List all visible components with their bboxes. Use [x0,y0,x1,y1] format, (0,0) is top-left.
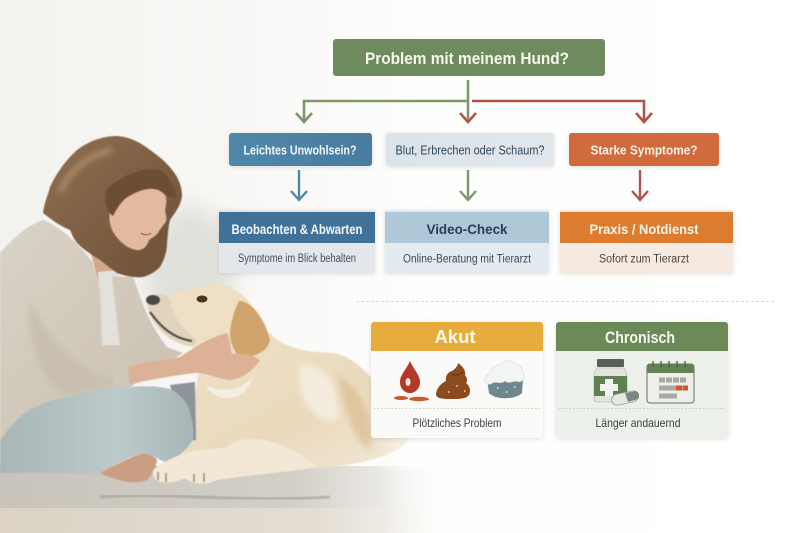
inner shirt [98,270,124,345]
panel: Chronisch [556,322,728,438]
question: Leichtes Unwohlsein: Leichtes Unwohlsein? [244,142,357,158]
arrow: green down [460,170,476,200]
dog muzzle [147,295,197,346]
card: Video-Check: Video-Check [426,221,508,237]
question: Leichtes Unwohlsein [229,133,372,166]
card: Beobachten und Abwarten: Symptome im Blick behalten [238,253,356,265]
panel: Akut [371,322,543,438]
dog front legs and paws [153,439,315,484]
Akut card base [371,322,543,438]
green branch to the left [296,101,468,122]
Akut heading: Akut [434,326,476,347]
Chronisch header [556,322,728,351]
red centre arrowhead [460,113,476,122]
ear and temple hair [105,169,176,216]
Chronisch divider [559,408,725,410]
Akut divider [374,408,540,410]
smile [141,233,151,235]
Akut caption: Plötzliches Problem [412,416,502,430]
dog eye [196,296,208,302]
neck [88,240,118,292]
photo: woman petting dog on carpet [0,136,450,533]
arrow: blue down [291,170,307,200]
dog head [147,283,262,365]
icon: calendar [647,361,694,403]
red branch to the right [472,101,652,122]
card: Video-Check: Online-Beratung mit Tierarzt [403,254,532,266]
woman [0,136,260,482]
legs [0,386,194,473]
icon: foam [485,361,524,398]
question: Starke Symptome [569,133,719,166]
card: Praxis / Notdienst: Sofort zum Tierarzt [599,254,690,266]
icon: medicine bottle and pill [594,359,639,406]
foot [100,453,157,482]
blanket between legs and dog [170,382,196,440]
title box [333,39,605,76]
dog fur highlights [299,365,338,421]
soft room shadow behind the figures [145,205,235,335]
sweater [0,220,183,440]
floor carpet [0,466,450,533]
dog [146,283,408,472]
question: Blut, Erbrechen oder Schaum [386,133,554,166]
Chronisch heading: Chronisch [605,328,675,347]
dog body [173,333,408,472]
question: Blut, Erbrechen oder Schaum: Blut, Erbrechen oder Schaum? [396,144,545,158]
arrow network from main question [296,80,652,122]
hair highlight [60,150,112,192]
green centre stem [467,80,469,120]
title box: Problem mit meinem Hund? [365,50,569,68]
Chronisch card base [556,322,728,438]
card: Praxis / Notdienst [560,210,733,273]
face [109,178,166,250]
card: Beobachten und Abwarten [219,210,375,273]
card: Praxis / Notdienst: Praxis / Notdienst [590,221,699,237]
card: Beobachten und Abwarten: Beobachten & Abwarten [232,222,362,237]
icon: blood drop [394,361,429,401]
icon: stool [436,363,470,399]
hair [43,136,182,277]
card: Video-Check [385,210,549,273]
sweater sleeve shading [29,300,120,397]
fade overlay to white [375,340,440,470]
dog nose [146,295,160,305]
dog mouth [150,312,192,341]
arrow: red down [632,170,648,200]
dog ear [230,301,270,358]
Chronisch caption: Länger andauernd [596,416,680,430]
cuff [112,362,131,388]
question: Starke Symptome: Starke Symptome? [590,142,698,158]
forearm and hand on dog [128,333,260,384]
Akut header [371,322,543,351]
